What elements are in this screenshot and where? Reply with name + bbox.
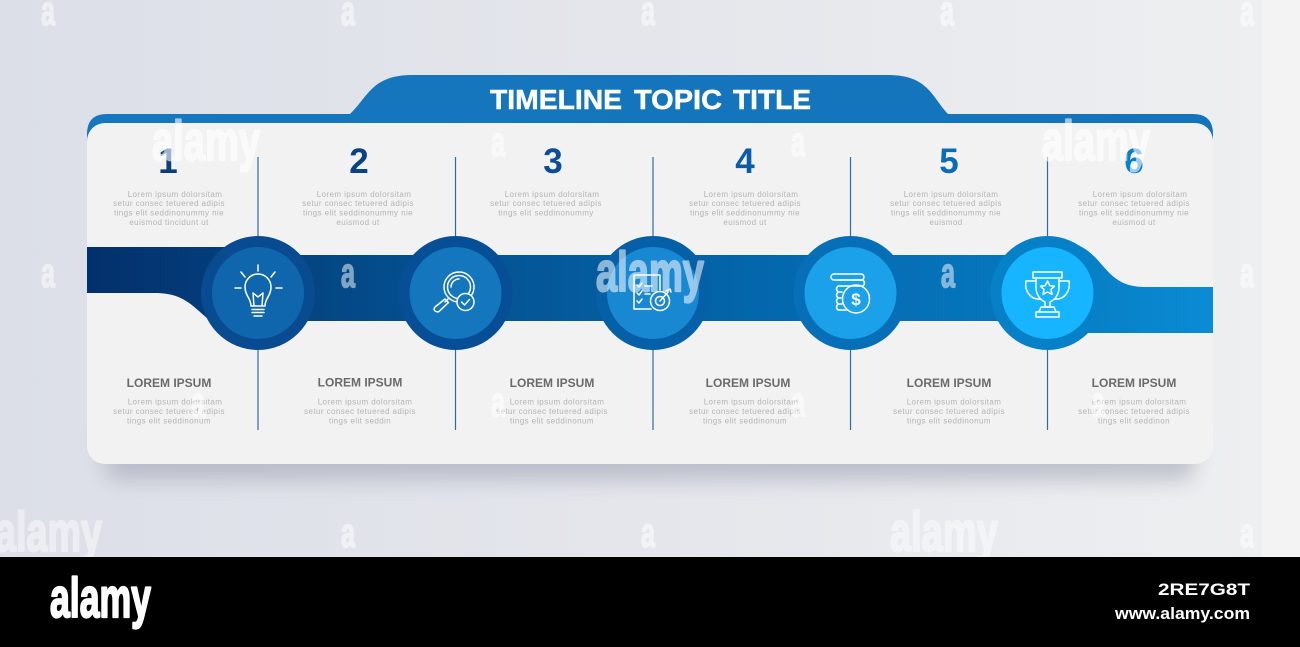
node 5 [990, 236, 1104, 350]
number 1: 1 [158, 142, 178, 181]
title [490, 84, 811, 115]
title: TIMELINE [490, 84, 622, 115]
footer logo: alamy [50, 566, 151, 629]
description 4: Lorem ipsum dolorsitam [704, 190, 798, 199]
title tab and top band [87, 75, 1213, 150]
description 4: tings elit seddinonummy nie [690, 208, 800, 218]
lower text 4: tings elit seddinonum [703, 416, 787, 426]
watermarks: alamy [890, 500, 998, 563]
lower text 1: setur consec tetuered adipis [113, 407, 225, 416]
lower text 2: setur consec tetuered adipis [304, 407, 416, 416]
watermarks: a [341, 509, 355, 556]
step 6 [1078, 142, 1190, 426]
watermarks: a [1240, 249, 1254, 296]
step 4 [689, 142, 908, 426]
lower text 2 [304, 398, 416, 426]
footer url: www.alamy.com [1114, 604, 1250, 623]
description 5: setur consec tetuered adipis [890, 199, 1002, 208]
number 4: 4 [735, 142, 755, 181]
watermarks: a [1240, 509, 1254, 556]
watermarks: alamy [596, 240, 704, 303]
watermarks: a [1091, 378, 1105, 425]
description 1: tings elit seddinonummy nie [114, 208, 224, 218]
description 4: euismod ut [723, 218, 767, 227]
lower text 6: Lorem ipsum dolorsitam [1092, 398, 1186, 406]
description 1: Lorem ipsum dolorsitam [128, 190, 222, 199]
number 3: 3 [543, 142, 563, 181]
lower text 4: setur consec tetuered adipis [689, 407, 801, 416]
description 5: Lorem ipsum dolorsitam [904, 190, 998, 199]
description 3: Lorem ipsum dolorsitam [505, 190, 599, 199]
watermarks: alamy [1042, 109, 1150, 172]
description 3: tings elit seddinonummy [498, 208, 594, 218]
icon: magnifier with check [434, 272, 474, 312]
description 2: Lorem ipsum dolorsitam [317, 190, 411, 199]
icon: coins: $ [851, 290, 861, 309]
watermarks: a [791, 118, 805, 165]
lower text 6 [1078, 398, 1190, 426]
lower text 3: tings elit seddinonum [510, 416, 594, 426]
lower text 5: Lorem ipsum dolorsitam [907, 398, 1001, 406]
description 3: setur consec tetuered adipis [490, 199, 602, 208]
watermarks: a [791, 378, 805, 425]
number 5: 5 [939, 142, 959, 181]
number 6: 6 [1124, 142, 1144, 181]
node 1 [201, 236, 315, 350]
description 6: euismod ut [1112, 218, 1156, 227]
image id: 2RE7G8T [1158, 580, 1251, 599]
icon: trophy [1026, 272, 1069, 317]
description 6: setur consec tetuered adipis [1078, 199, 1190, 208]
lower text 5: setur consec tetuered adipis [893, 407, 1005, 416]
lower text 1: tings elit seddinonum [127, 416, 211, 426]
number 2: 2 [349, 142, 369, 181]
lower text 4: Lorem ipsum dolorsitam [704, 398, 798, 406]
icon: light bulb [235, 265, 282, 316]
title: TITLE [733, 84, 811, 115]
watermarks: a [941, 249, 955, 296]
lower heading 3: LOREM IPSUM [510, 376, 594, 390]
watermarks: alamy [152, 109, 260, 172]
description 4: setur consec tetuered adipis [689, 199, 801, 208]
lower text 5: tings elit seddinonum [907, 416, 991, 426]
ribbon [87, 245, 1213, 333]
description 6: Lorem ipsum dolorsitam [1093, 190, 1187, 199]
vertical dividers [258, 157, 1048, 430]
lower heading 6: LOREM IPSUM [1092, 376, 1176, 390]
panel shadow [105, 420, 1195, 480]
footer bar [0, 557, 1300, 647]
step 2 [302, 142, 512, 426]
description 1: euismod tincidunt ut [129, 218, 209, 227]
step 3 [490, 142, 710, 426]
lower text 5 [893, 398, 1005, 426]
description 1: setur consec tetuered adipis [113, 199, 225, 208]
description 5: euismod [929, 218, 963, 227]
watermarks: a [191, 378, 205, 425]
watermarks: a [491, 118, 505, 165]
description 3 [490, 190, 602, 218]
main panel [87, 123, 1213, 464]
lower text 2: tings elit seddin [329, 416, 391, 426]
step 1 [113, 142, 315, 426]
lower heading 1: LOREM IPSUM [127, 376, 211, 390]
lower text 6: tings elit seddinon [1098, 416, 1170, 426]
lower text 1: Lorem ipsum dolorsitam [128, 398, 222, 406]
watermarks: a [641, 509, 655, 556]
watermarks: a [41, 249, 55, 296]
node 2 [398, 236, 512, 350]
description 6: tings elit seddinonummy nie [1079, 208, 1189, 218]
description 5 [890, 190, 1002, 227]
node 4 [794, 236, 908, 350]
lower text 3 [496, 398, 608, 426]
description 2: tings elit seddinonummy nie [303, 208, 413, 218]
lower text 6: setur consec tetuered adipis [1078, 407, 1190, 416]
node 3 [596, 236, 710, 350]
title: TOPIC [634, 84, 722, 115]
description 5: tings elit seddinonummy nie [891, 208, 1001, 218]
lower text 4 [689, 398, 801, 426]
description 4 [689, 190, 801, 227]
icon: checklist with target [634, 275, 671, 310]
description 2: euismod ut [336, 218, 380, 227]
watermarks: a [341, 249, 355, 296]
lower heading 2: LOREM IPSUM [318, 376, 402, 390]
watermarks: a [491, 378, 505, 425]
icon: coins [831, 274, 870, 313]
lower text 1 [113, 398, 225, 426]
lower heading 4: LOREM IPSUM [706, 376, 790, 390]
description 6 [1078, 190, 1190, 227]
lower text 3: setur consec tetuered adipis [496, 407, 608, 416]
lower text 2: Lorem ipsum dolorsitam [318, 398, 412, 406]
lower heading 5: LOREM IPSUM [907, 376, 991, 390]
description 2 [302, 190, 414, 227]
step 5 [890, 142, 1104, 426]
description 1 [113, 190, 225, 227]
description 2: setur consec tetuered adipis [302, 199, 414, 208]
lower text 3: Lorem ipsum dolorsitam [510, 398, 604, 406]
